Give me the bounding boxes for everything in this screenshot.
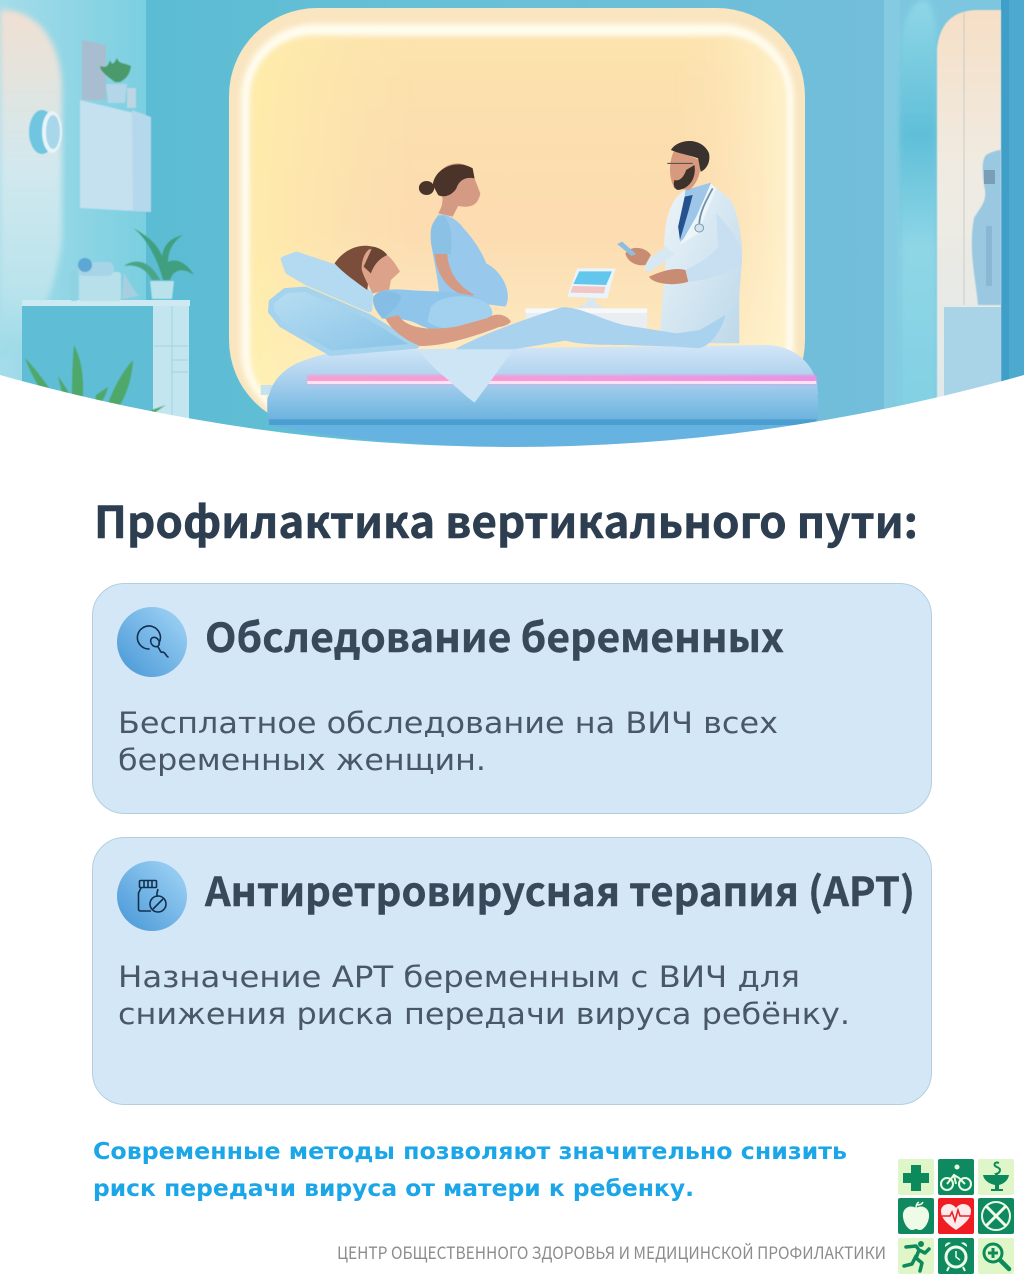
card body text: [118, 706, 778, 777]
wall round device: [29, 110, 62, 154]
icon: magnifier with plus: [978, 1238, 1014, 1274]
monitor: [567, 268, 616, 308]
closing callout: Современные методы позволяют значительно снизить: [93, 1139, 847, 1165]
closing callout: [93, 1139, 847, 1202]
icon: bowl of hygieia: [978, 1159, 1014, 1195]
headrest: [271, 289, 416, 353]
lower cabinet: [22, 300, 190, 424]
pillow: [284, 255, 370, 309]
potted plant: [124, 228, 194, 299]
card body text: [118, 960, 850, 1031]
card background: [92, 584, 932, 814]
card body text: Бесплатное обследование на ВИЧ всех: [118, 706, 778, 740]
glowing window: [229, 8, 805, 428]
organisation name: ЦЕНТР ОБЩЕСТВЕННОГО ЗДОРОВЬЯ И МЕДИЦИНСКОЙ ПРОФИЛАКТИКИ: [337, 1239, 886, 1264]
back wall: [145, 0, 885, 450]
mattress: [269, 345, 818, 398]
card heading: Обследование беременных: [205, 606, 784, 664]
aloe plant: [25, 345, 166, 418]
panel: antiretroviral therapy: [92, 838, 932, 1104]
title: Профилактика вертикального пути:: [94, 487, 918, 551]
logo: health icon grid: [898, 1159, 1014, 1274]
pink light strip: [307, 375, 816, 384]
card body text: Назначение АРТ беременным с ВИЧ для: [118, 960, 800, 994]
icon: pill bottle: [117, 861, 187, 931]
card body text: снижения риска передачи вируса ребёнку.: [118, 997, 850, 1031]
hero illustration: clinic room: [0, 0, 1024, 460]
wall shelf with plant: [80, 40, 151, 212]
panel: screening: [92, 584, 932, 814]
countertop device: [70, 258, 139, 301]
card background: [92, 838, 932, 1104]
doctor: [617, 141, 742, 343]
left side wall: [0, 0, 146, 450]
icon: runner: [898, 1238, 934, 1274]
icon: cyclist: [938, 1159, 974, 1195]
side table: [525, 308, 647, 331]
blanket: [418, 350, 513, 403]
card body text: беременных женщин.: [118, 743, 486, 777]
white curved divider: [0, 375, 1024, 460]
card heading: Антиретровирусная терапия (АРТ): [204, 860, 915, 918]
figures and bed: [261, 141, 818, 448]
icon: cross: [898, 1159, 934, 1195]
standing pregnant woman: [419, 163, 508, 307]
bed base: [261, 385, 818, 448]
icon: apple: [898, 1198, 934, 1234]
icon: no smoking: [978, 1198, 1014, 1234]
left arch niche: [0, 10, 62, 360]
doorway with silhouette: [937, 10, 1001, 410]
closing callout: риск передачи вируса от матери к ребенку.: [93, 1176, 694, 1202]
icon: alarm clock: [938, 1238, 974, 1274]
right wall panels: [884, 0, 1024, 450]
icon: heart with pulse: [938, 1198, 974, 1234]
reclining pregnant woman: [335, 246, 725, 349]
icon: sperm and egg: [117, 607, 187, 677]
